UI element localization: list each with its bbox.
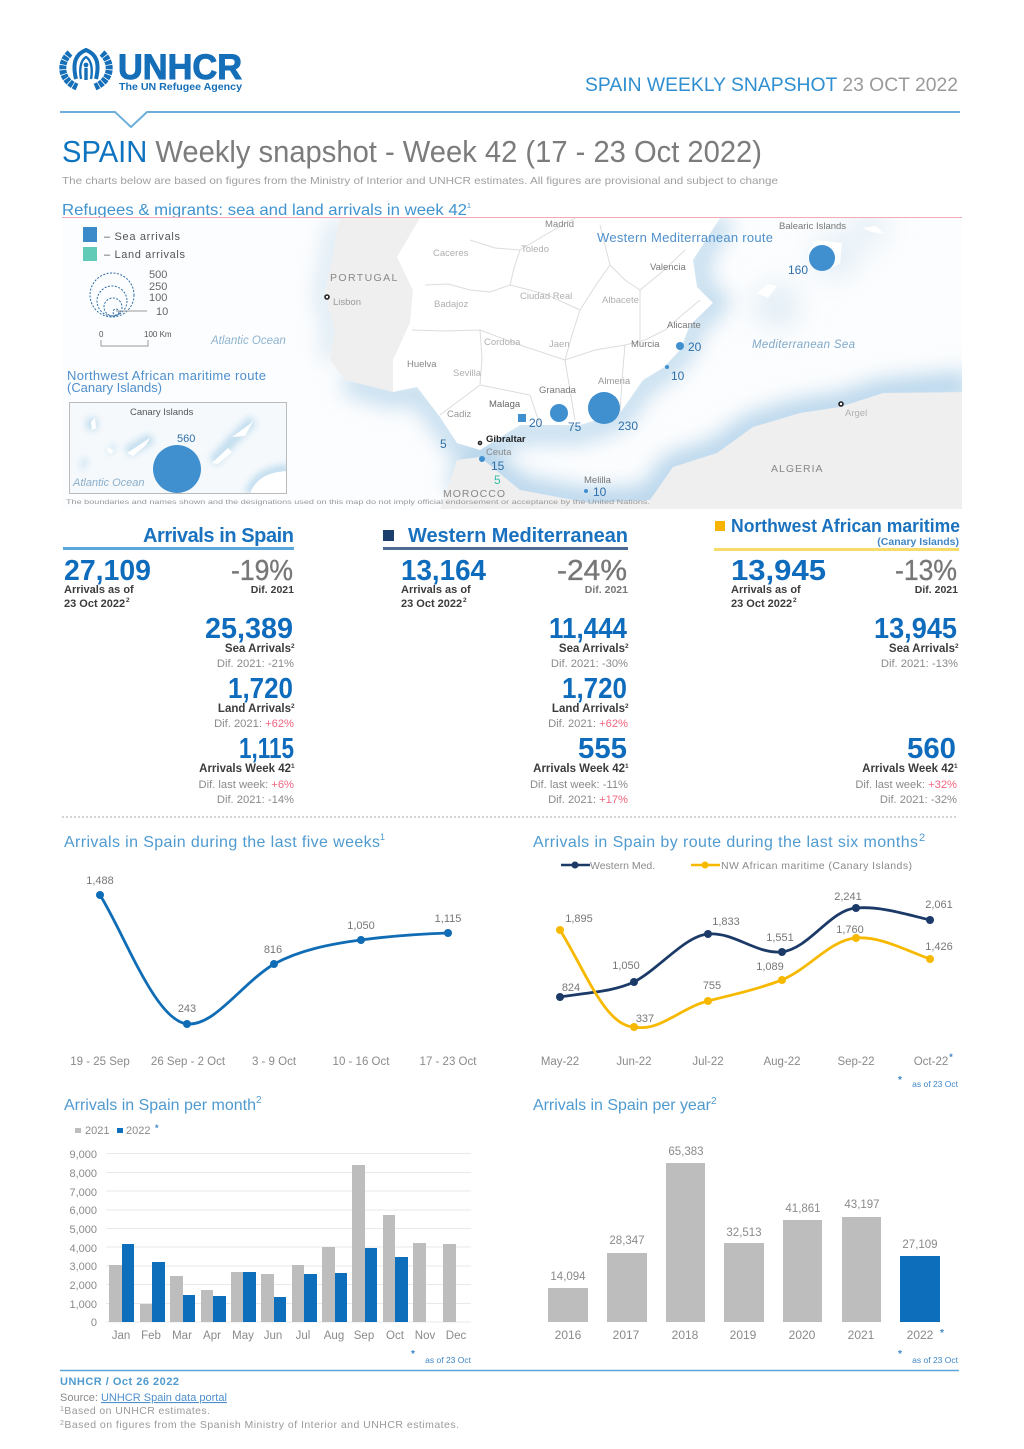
inset: Canary Islands: Canary Islands	[130, 407, 194, 418]
sea arrivals: 25,389	[205, 613, 293, 645]
legend: arrivals type: – Land arrivals	[104, 249, 186, 261]
sea arrivals	[874, 613, 959, 670]
x axis labels: 2018	[672, 1328, 699, 1342]
scale bar: 0	[99, 330, 104, 339]
weekly arrivals: Dif. last week: +6%	[199, 779, 294, 791]
chart heading: 2	[711, 1096, 717, 1107]
logo: UNHCR	[63, 48, 242, 93]
sea arrivals: Dif. 2021: -30%	[551, 658, 628, 670]
axis labels: 3 - 9 Oct	[252, 1056, 297, 1068]
sea arrivals: 13,945	[874, 613, 957, 645]
weekly arrivals	[855, 733, 958, 806]
total arrivals: 23 Oct 2022	[731, 598, 792, 610]
footer: Based on figures from the Spanish Ministry of Interior and UNHCR estimates.	[64, 1419, 459, 1431]
footnote	[898, 1075, 959, 1089]
difference 2021: -13%	[895, 555, 957, 587]
total arrivals: Arrivals as of	[401, 584, 471, 596]
data labels: 28,347	[609, 1235, 645, 1247]
data labels: 41,861	[785, 1203, 821, 1215]
land arrivals: 1,720	[228, 673, 293, 705]
x axis labels: 2020	[789, 1328, 816, 1342]
panel: map of Spain	[62, 218, 970, 520]
footer: 2	[60, 1420, 64, 1427]
legend: 2021	[85, 1125, 109, 1137]
arrivals values: 5	[440, 437, 447, 451]
total arrivals: 2	[463, 597, 467, 604]
bars: 2022	[122, 1244, 408, 1322]
data labels: 243	[178, 1003, 196, 1015]
land arrivals: 1,720	[562, 673, 627, 705]
x axis labels	[555, 1328, 944, 1342]
total arrivals: 27,109	[64, 555, 151, 587]
weekly arrivals: 555	[578, 733, 627, 765]
weekly arrivals	[530, 733, 629, 806]
place names: Lisbon	[333, 297, 361, 308]
chart heading: 2	[256, 1095, 262, 1106]
heading: map section: 1	[467, 203, 471, 210]
icon: UNHCR wreath emblem	[63, 50, 109, 87]
y axis labels: 5,000	[69, 1224, 97, 1236]
data labels: 65,383	[668, 1146, 704, 1158]
place names: Huelva	[407, 359, 437, 370]
arrivals values	[440, 263, 808, 499]
place names: Balearic Islands	[779, 221, 846, 232]
ocean and route labels: Western Mediterranean route	[597, 230, 773, 245]
weekly arrivals: 1	[954, 763, 958, 770]
y axis labels: 8,000	[69, 1168, 97, 1180]
heading: map section: Refugees & migrants: sea and land arrivals in week 42	[62, 202, 467, 219]
x axis labels: 2022	[907, 1328, 934, 1342]
y axis labels: 6,000	[69, 1205, 97, 1217]
place names: Granada	[539, 385, 577, 396]
y axis labels: 7,000	[69, 1187, 97, 1199]
data labels: 1,760	[836, 924, 864, 936]
axis labels: 26 Sep - 2 Oct	[151, 1056, 226, 1068]
x axis labels: 2021	[848, 1328, 875, 1342]
place names: Albacete	[602, 295, 639, 306]
ocean and route labels: (Canary Islands)	[67, 380, 162, 395]
chart heading: Arrivals in Spain during the last five weeks	[64, 834, 380, 851]
inset: Canary Islands	[70, 402, 290, 500]
scale bar	[99, 330, 172, 346]
panel: Arrivals in Spain	[63, 525, 295, 806]
legend: size labels	[149, 269, 168, 318]
footnote: *	[898, 1349, 902, 1360]
legend: arrivals type	[83, 227, 186, 261]
place names: Melilla	[584, 475, 612, 486]
weekly arrivals: 560	[907, 733, 956, 765]
data labels: 43,197	[844, 1199, 880, 1211]
x axis labels: Feb	[141, 1330, 161, 1342]
weekly arrivals: Dif. 2021: -14%	[217, 794, 294, 806]
place names: Sevilla	[453, 368, 482, 379]
x axis labels: Sep	[354, 1330, 374, 1342]
map disclaimer: The boundaries and names shown and the designations used on this map do not imply official endorsement or acceptance by the United Nations.	[66, 500, 650, 506]
weekly arrivals: 1	[625, 763, 629, 770]
x axis labels	[112, 1330, 466, 1342]
legend: size labels: 500	[149, 269, 167, 281]
sea arrivals	[205, 613, 295, 670]
arrivals values: 5	[494, 473, 501, 487]
weekly arrivals: Arrivals Week 42	[199, 763, 291, 775]
legend: size labels: 250	[149, 281, 167, 293]
axis labels	[541, 1052, 953, 1068]
sea arrivals: 2	[955, 643, 959, 650]
land arrivals: 2	[625, 703, 629, 710]
weekly arrivals: Dif. 2021: -32%	[880, 794, 957, 806]
chart heading: Arrivals in Spain by route during the last six months	[533, 834, 918, 851]
total arrivals: 23 Oct 2022	[401, 598, 462, 610]
title: SPAIN Weekly snapshot - Week 42 (17 - 23 Oct 2022)	[62, 134, 762, 169]
place names: Caceres	[433, 248, 469, 259]
chart: arrivals last five weeks	[64, 832, 477, 1068]
x axis labels: 2017	[613, 1328, 640, 1342]
chart heading: 2	[919, 832, 925, 844]
legend: NW African maritime (Canary Islands)	[721, 860, 912, 872]
weekly arrivals: Arrivals Week 42	[862, 763, 954, 775]
y axis labels: 0	[91, 1317, 97, 1329]
sea arrivals: Sea Arrivals	[225, 643, 291, 655]
difference 2021: Dif. 2021	[251, 584, 294, 596]
subtitle: The charts below are based on figures from the Ministry of Interior and UNHCR estimates. All figures are provisional and subject to change	[62, 175, 778, 187]
total arrivals: 2	[126, 597, 130, 604]
footer: UNHCR / Oct 26 2022	[60, 1376, 179, 1388]
place names: Jaen	[549, 339, 570, 350]
arrivals values: 230	[618, 419, 638, 433]
total arrivals: Arrivals as of	[731, 584, 801, 596]
pink rule under map heading	[62, 217, 962, 218]
sea arrivals: 11,444	[549, 613, 627, 645]
total arrivals	[401, 555, 486, 610]
footnote: as of 23 Oct	[912, 1355, 959, 1365]
x axis labels: *	[940, 1328, 944, 1339]
footnote: as of 23 Oct	[912, 1079, 959, 1089]
ocean and route labels	[67, 230, 855, 395]
sea arrivals	[549, 613, 629, 670]
axis labels: 17 - 23 Oct	[420, 1056, 477, 1068]
data labels: 1,833	[712, 916, 740, 928]
map geography	[323, 218, 970, 520]
axis labels: *	[949, 1052, 953, 1062]
axis labels: Jun-22	[616, 1056, 652, 1068]
y axis labels: 1,000	[69, 1299, 97, 1311]
legend: Western Med.	[590, 860, 655, 872]
ocean and route labels: Mediterranean Sea	[752, 339, 855, 351]
x axis labels: 2016	[555, 1328, 582, 1342]
header rule with notch	[60, 112, 960, 127]
place names: Murcia	[631, 339, 660, 350]
x axis labels: Apr	[203, 1330, 221, 1342]
arrivals values: 20	[688, 340, 702, 354]
arrivals bubbles	[479, 245, 835, 493]
data labels: 1,089	[756, 961, 784, 973]
panel: Northwest African maritime	[714, 516, 960, 806]
weekly arrivals: Dif. last week: +32%	[855, 779, 957, 791]
footnote: *	[898, 1075, 902, 1086]
y axis labels: 2,000	[69, 1280, 97, 1292]
panel: Western Mediterranean	[383, 525, 629, 806]
arrivals values: 10	[593, 485, 607, 499]
arrivals values: 20	[529, 416, 543, 430]
sea arrivals: Sea Arrivals	[559, 643, 625, 655]
total arrivals: 13,945	[731, 555, 826, 587]
sea arrivals: Sea Arrivals	[889, 643, 955, 655]
arrivals values: 10	[671, 369, 685, 383]
x axis labels: May	[232, 1330, 254, 1342]
place names: Alicante	[667, 320, 701, 331]
data labels: 1,895	[565, 913, 593, 925]
series: Western Med	[556, 904, 934, 1001]
x axis labels: Dec	[446, 1330, 466, 1342]
x axis labels: Jul	[296, 1330, 310, 1342]
place names: Madrid	[545, 219, 574, 230]
footer	[60, 1376, 459, 1431]
y axis labels: 4,000	[69, 1243, 97, 1255]
data labels	[86, 875, 461, 1015]
heading	[715, 516, 960, 548]
footnote	[411, 1349, 472, 1365]
sea arrivals: Dif. 2021: -13%	[881, 658, 958, 670]
weekly arrivals: Dif. last week: -11%	[530, 779, 628, 791]
axis labels: Sep-22	[837, 1056, 875, 1068]
land arrivals: 2	[291, 703, 295, 710]
place names: Badajoz	[434, 299, 469, 310]
inset: Canary Islands: 560	[177, 433, 195, 445]
footnote	[898, 1349, 959, 1365]
data labels: 2,241	[834, 891, 862, 903]
ocean and route labels: Atlantic Ocean	[210, 335, 286, 347]
footer: 1	[60, 1406, 64, 1413]
data labels: 1,115	[435, 913, 461, 925]
data labels: 816	[264, 944, 282, 956]
data labels: 2,061	[925, 899, 953, 911]
y axis labels: 9,000	[69, 1149, 97, 1161]
axis labels: Aug-22	[763, 1056, 801, 1068]
arrivals values: 15	[491, 459, 505, 473]
footnote: *	[411, 1349, 415, 1360]
place names: Cadiz	[447, 409, 472, 420]
place names: Gibraltar	[486, 434, 526, 445]
place names: Ceuta	[486, 447, 512, 458]
arrivals values: 75	[568, 420, 582, 434]
scale bar: 100 Km	[144, 330, 172, 339]
legend: size labels: 100	[149, 292, 167, 304]
x axis labels: Jun	[264, 1330, 282, 1342]
chart heading: Arrivals in Spain per month	[64, 1097, 256, 1114]
heading: Arrivals in Spain	[143, 525, 294, 547]
sea arrivals: 2	[291, 643, 295, 650]
total arrivals: 13,164	[401, 555, 486, 587]
logo: UNHCR: The UN Refugee Agency	[119, 81, 242, 93]
bars	[548, 1163, 940, 1322]
weekly arrivals: Dif. 2021: +17%	[548, 794, 628, 806]
data labels: 32,513	[726, 1227, 762, 1239]
total arrivals	[64, 555, 151, 610]
place names: Valencia	[650, 262, 686, 273]
chart: arrivals per year	[533, 1096, 959, 1365]
data labels: 1,551	[766, 932, 794, 944]
weekly arrivals: Arrivals Week 42	[533, 763, 625, 775]
place names: PORTUGAL	[330, 272, 399, 284]
total arrivals	[731, 555, 826, 610]
x axis labels: Aug	[324, 1330, 344, 1342]
difference 2021: Dif. 2021	[585, 584, 628, 596]
logo: UNHCR: UNHCR	[118, 48, 242, 87]
x axis labels: Oct	[386, 1330, 405, 1342]
heading: Western Mediterranean	[408, 525, 628, 547]
heading: (Canary Islands)	[877, 536, 959, 548]
chart: arrivals per month	[64, 1095, 472, 1365]
x axis labels: Nov	[415, 1330, 435, 1342]
place names: Toledo	[521, 244, 549, 255]
legend	[75, 1123, 159, 1137]
footer: Based on UNHCR estimates.	[64, 1405, 210, 1417]
series: NW African maritime	[556, 926, 934, 1031]
land arrivals: Land Arrivals	[552, 703, 625, 715]
total arrivals: 23 Oct 2022	[64, 598, 125, 610]
weekly arrivals: 1	[291, 763, 295, 770]
data labels: 755	[703, 980, 721, 992]
place names: Cordoba	[484, 337, 521, 348]
sea arrivals: 2	[625, 643, 629, 650]
data labels: 1,426	[925, 941, 953, 953]
sea arrivals: Dif. 2021: -21%	[217, 658, 294, 670]
inset: Canary Islands: Atlantic Ocean	[72, 477, 145, 489]
axis labels: May-22	[541, 1056, 579, 1068]
legend: size labels: 10	[156, 306, 168, 318]
y axis labels: 3,000	[69, 1261, 97, 1273]
x axis labels: 2019	[730, 1328, 757, 1342]
difference 2021: -24%	[557, 555, 627, 587]
place names: Ciudad Real	[520, 291, 572, 302]
axis labels: Jul-22	[692, 1056, 724, 1068]
data labels: 337	[636, 1013, 654, 1025]
data labels	[550, 1146, 938, 1283]
data labels: 1,050	[612, 960, 640, 972]
chart: arrivals by route	[533, 832, 959, 1089]
legend: arrivals type: – Sea arrivals	[104, 231, 180, 243]
place names: ALGERIA	[771, 463, 824, 475]
place names	[330, 219, 867, 500]
line series	[96, 891, 452, 1028]
data labels	[562, 891, 953, 1025]
chart heading: 1	[380, 832, 385, 842]
land arrivals: Land Arrivals	[218, 703, 291, 715]
difference 2021: Dif. 2021	[915, 584, 958, 596]
y axis labels	[69, 1149, 97, 1329]
land arrivals	[214, 673, 295, 730]
land arrivals: Dif. 2021: +62%	[214, 718, 294, 730]
capital markers	[325, 295, 843, 444]
footer: Source: UNHCR Spain data portal	[60, 1392, 227, 1404]
data labels: 1,488	[86, 875, 114, 887]
total arrivals: 2	[793, 597, 797, 604]
heading: Northwest African maritime	[731, 516, 960, 536]
data labels: 1,050	[347, 920, 375, 932]
place names: Almeria	[598, 376, 631, 387]
difference 2021: -19%	[231, 555, 293, 587]
axis labels: 19 - 25 Sep	[70, 1056, 130, 1068]
weekly arrivals	[199, 733, 295, 806]
legend	[561, 860, 912, 872]
weekly arrivals: 1,115	[239, 733, 294, 765]
place names: Malaga	[489, 399, 521, 410]
land arrivals	[548, 673, 629, 730]
data labels: 824	[562, 982, 580, 994]
arrivals values: 160	[788, 263, 808, 277]
axis labels	[70, 1056, 477, 1068]
axis labels: Oct-22	[914, 1056, 948, 1068]
land arrivals: Dif. 2021: +62%	[548, 718, 628, 730]
legend: 2022	[126, 1125, 150, 1137]
place names: Argel	[845, 408, 867, 419]
data labels: 14,094	[550, 1271, 586, 1283]
x axis labels: Jan	[112, 1330, 130, 1342]
chart heading: Arrivals in Spain per year	[533, 1097, 712, 1114]
x axis labels: Mar	[172, 1330, 192, 1342]
data labels: 27,109	[902, 1239, 938, 1251]
axis labels: 10 - 16 Oct	[333, 1056, 390, 1068]
legend: *	[155, 1123, 159, 1133]
footnote: as of 23 Oct	[425, 1355, 472, 1365]
header: snapshot label: SPAIN WEEKLY SNAPSHOT 23 OCT 2022	[585, 75, 958, 96]
place names: MOROCCO	[443, 488, 506, 500]
total arrivals: Arrivals as of	[64, 584, 134, 596]
bars: 2021	[109, 1165, 456, 1322]
ocean and route labels: Northwest African maritime route	[67, 368, 266, 383]
legend: circle sizes	[90, 273, 147, 317]
